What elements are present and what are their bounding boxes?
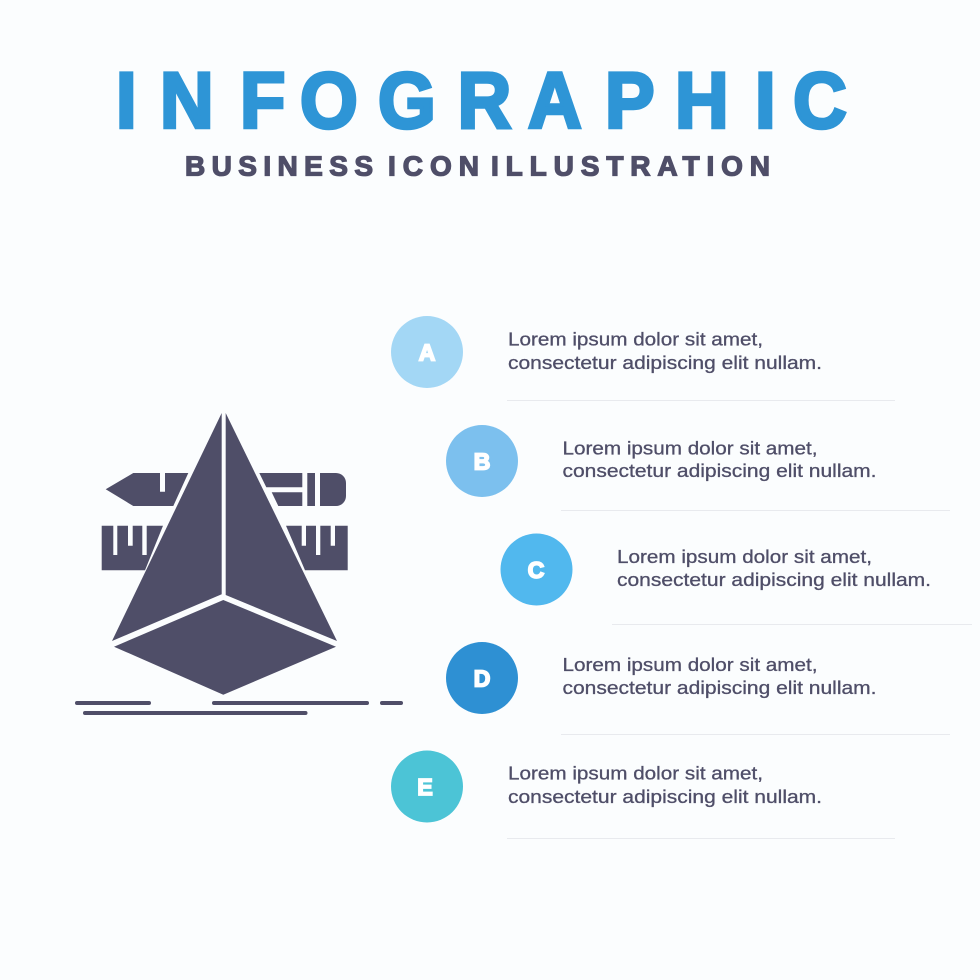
title: INFOGRAPHIC bbox=[116, 57, 847, 145]
item E bbox=[391, 750, 895, 839]
text C: consectetur adipiscing elit nullam. bbox=[617, 569, 931, 590]
text C bbox=[617, 546, 931, 590]
text D: consectetur adipiscing elit nullam. bbox=[562, 677, 876, 698]
circle D bbox=[446, 642, 518, 714]
pencil bbox=[106, 473, 346, 506]
pyramid bottom face bbox=[114, 600, 336, 695]
text A bbox=[508, 328, 822, 373]
text A: consectetur adipiscing elit nullam. bbox=[508, 352, 822, 373]
text C: Lorem ipsum dolor sit amet, bbox=[617, 546, 872, 567]
letter C: C bbox=[528, 557, 544, 583]
subtitle: BUSINESS bbox=[185, 150, 373, 182]
circle B bbox=[446, 425, 518, 497]
icon: 3D pyramid with pencil and ruler bbox=[75, 413, 403, 715]
text B: Lorem ipsum dolor sit amet, bbox=[562, 438, 818, 458]
subtitle: ICON bbox=[388, 150, 479, 182]
circle C bbox=[500, 534, 572, 606]
subtitle bbox=[185, 150, 770, 182]
letter A: A bbox=[419, 340, 435, 366]
text D bbox=[562, 654, 876, 698]
text E: consectetur adipiscing elit nullam. bbox=[508, 786, 822, 807]
subtitle: ILLUSTRATION bbox=[491, 150, 770, 182]
item B bbox=[446, 425, 950, 511]
letter D: D bbox=[474, 666, 490, 692]
pyramid right face bbox=[226, 413, 337, 641]
circle A bbox=[391, 316, 463, 388]
circle E bbox=[391, 750, 463, 822]
letter B: B bbox=[474, 448, 490, 474]
text A: Lorem ipsum dolor sit amet, bbox=[508, 328, 763, 350]
text E bbox=[508, 762, 822, 807]
text B: consectetur adipiscing elit nullam. bbox=[562, 460, 876, 481]
item D bbox=[446, 642, 950, 735]
text E: Lorem ipsum dolor sit amet, bbox=[508, 762, 763, 784]
pyramid left face bbox=[112, 413, 222, 641]
ruler bbox=[102, 526, 348, 570]
text B bbox=[562, 438, 876, 481]
item C bbox=[500, 534, 972, 625]
text D: Lorem ipsum dolor sit amet, bbox=[562, 654, 818, 675]
item A bbox=[391, 316, 895, 401]
letter E: E bbox=[417, 774, 433, 800]
ground lines bbox=[75, 701, 403, 715]
